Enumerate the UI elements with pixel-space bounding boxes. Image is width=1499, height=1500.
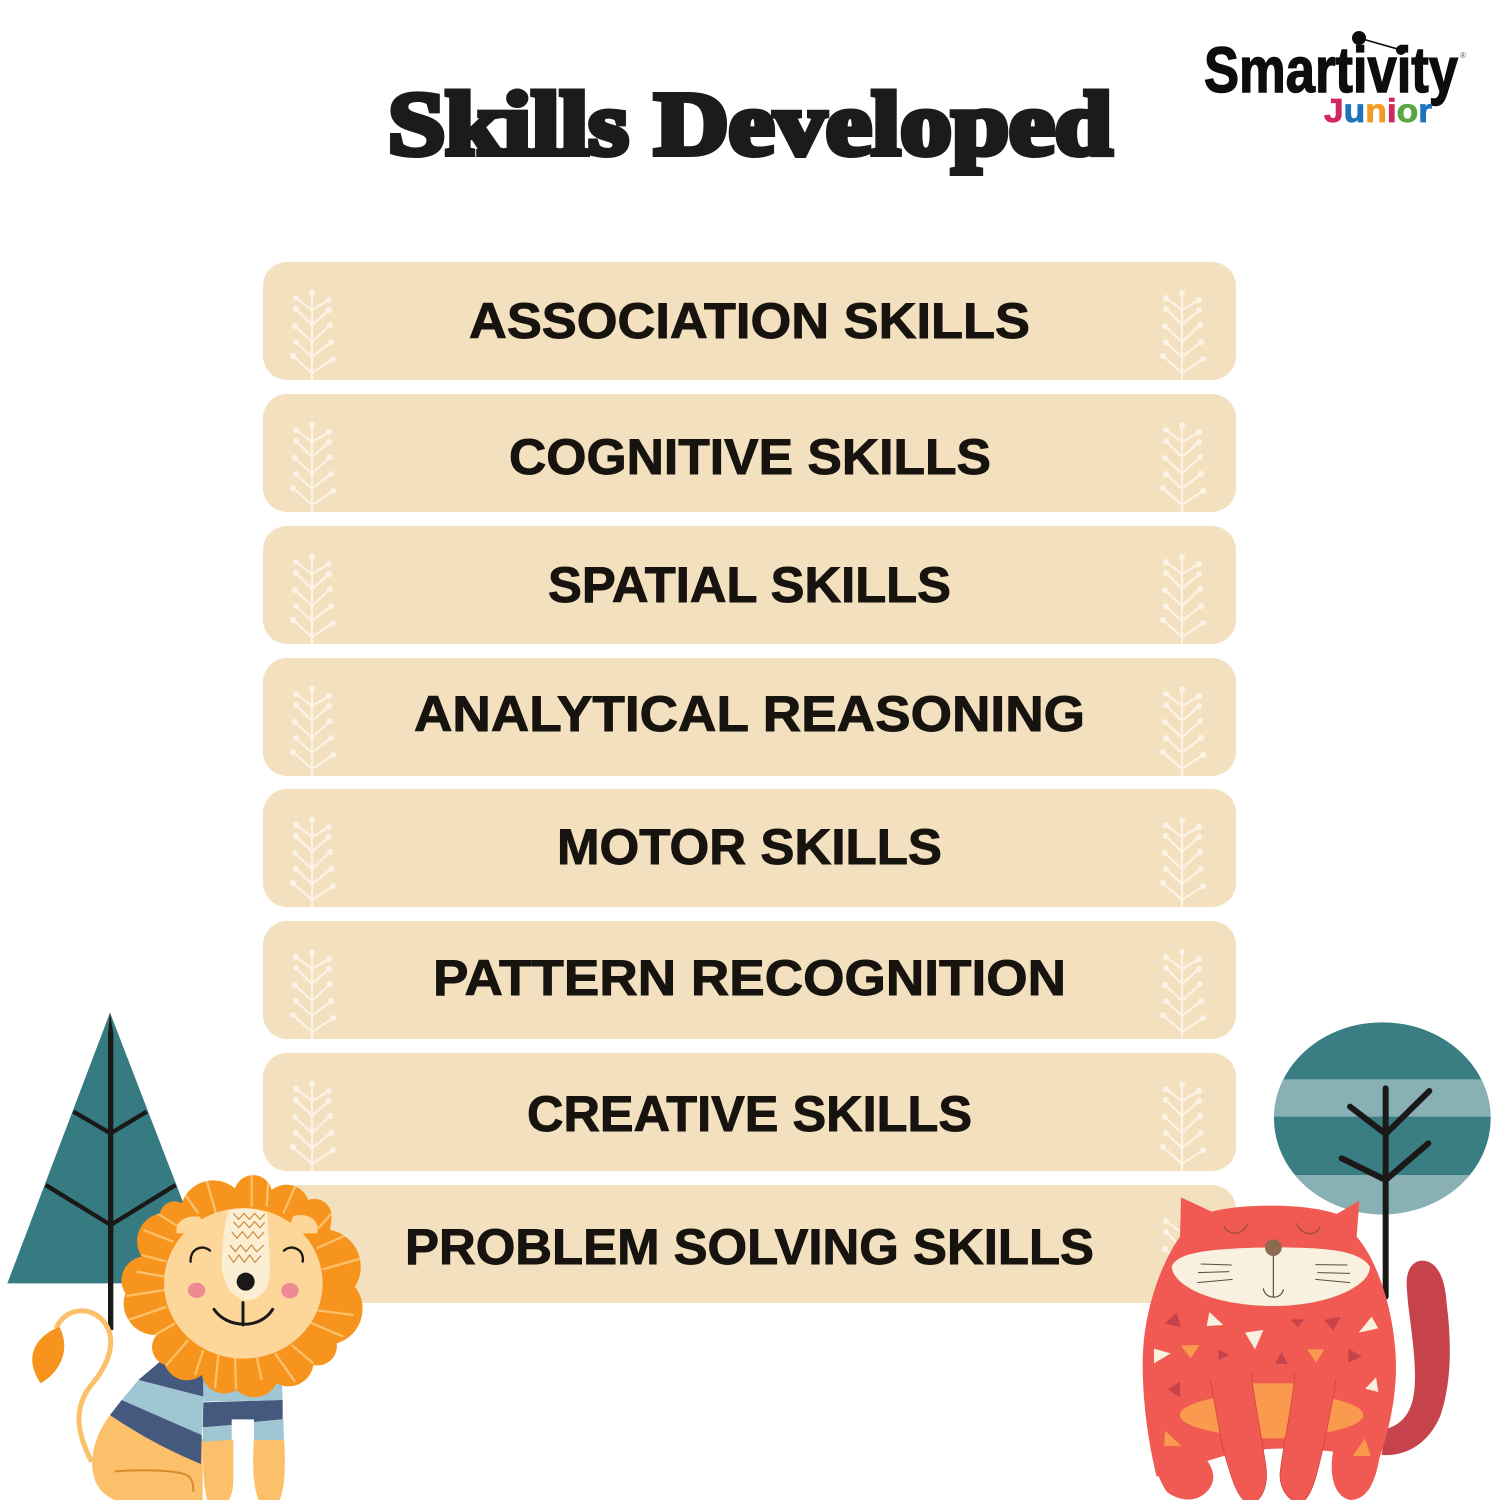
- panel: association skills: [263, 262, 1236, 380]
- logo: Smartivity Junior: [1204, 31, 1466, 129]
- lion tail: [56, 1311, 111, 1462]
- label: SPATIAL SKILLS: [548, 557, 951, 613]
- cat eyes: [1224, 1223, 1320, 1234]
- panel: creative skills: [263, 1053, 1236, 1171]
- label: PATTERN RECOGNITION: [433, 950, 1066, 1006]
- lion nose: [237, 1273, 255, 1291]
- lion cheek left: [188, 1283, 205, 1298]
- label: ASSOCIATION SKILLS: [469, 293, 1030, 349]
- cat outer legs: [1150, 1437, 1381, 1500]
- label: ANALYTICAL REASONING: [414, 686, 1085, 742]
- panel: analytical reasoning: [263, 658, 1236, 776]
- label: MOTOR SKILLS: [557, 819, 942, 875]
- lion body: [92, 1415, 203, 1500]
- logo connector dots: [1352, 31, 1406, 55]
- label: CREATIVE SKILLS: [527, 1086, 972, 1142]
- lion mouth: [214, 1303, 273, 1325]
- lion tail tuft: [32, 1327, 64, 1383]
- lion mane rays: [126, 1173, 362, 1389]
- lion legs: [203, 1439, 285, 1500]
- panel: pattern recognition: [263, 921, 1236, 1039]
- panel: problem solving skills: [263, 1185, 1236, 1303]
- cat leg outlines: [1210, 1373, 1336, 1500]
- registered mark: ®: [1460, 51, 1466, 60]
- icon: round striped tree: [1274, 1022, 1491, 1300]
- label: PROBLEM SOLVING SKILLS: [405, 1219, 1094, 1275]
- forehead zigzags: [228, 1213, 265, 1262]
- cat front legs: [1210, 1373, 1336, 1500]
- lion mane: [122, 1175, 363, 1397]
- title: Skills Developed: [388, 75, 1112, 174]
- icon: lion: [32, 1173, 363, 1500]
- panel: spatial skills: [263, 526, 1236, 644]
- cat mask: [1172, 1247, 1370, 1306]
- cat triangles: [1154, 1312, 1378, 1456]
- cat body: [1143, 1197, 1396, 1477]
- icon: cat: [1143, 1197, 1450, 1500]
- lion shirt: [110, 1362, 284, 1464]
- icon: triangular tree: [7, 1013, 214, 1330]
- lion eyes: [191, 1248, 303, 1262]
- cat nose and mouth: [1263, 1239, 1283, 1297]
- panel: motor skills: [263, 789, 1236, 907]
- label: COGNITIVE SKILLS: [509, 429, 991, 485]
- cat tail: [1382, 1261, 1450, 1455]
- lion forehead mark: [222, 1209, 270, 1300]
- logo sub-brand: Junior: [1324, 92, 1432, 129]
- panel: cognitive skills: [263, 394, 1236, 512]
- lion cheek right: [281, 1283, 299, 1298]
- lion haunch line: [115, 1470, 193, 1492]
- cat belly: [1180, 1383, 1363, 1438]
- lion face: [164, 1208, 323, 1359]
- cat whiskers: [1197, 1264, 1350, 1283]
